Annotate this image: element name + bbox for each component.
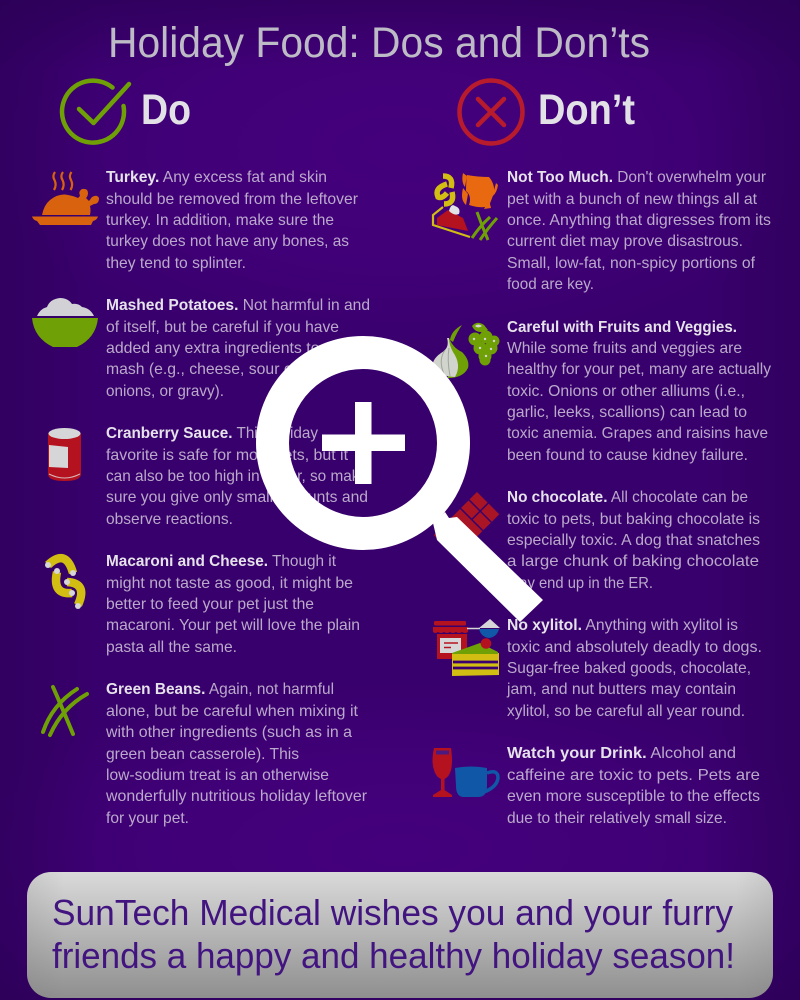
text: Cranberry Sauce: Cranberry Sauce. This holiday	[106, 425, 320, 442]
icon: onion and grapes	[433, 323, 500, 378]
text: Mashed Potatoes: mash (e.g., cheese, sour cream,	[106, 361, 332, 378]
text: Green Beans: for your pet.	[106, 810, 189, 827]
text: Watch your Drink: caffeine are toxic to pets. Pets are	[507, 767, 760, 784]
text: Watch your Drink: due to their relatively small size.	[507, 810, 727, 827]
text: Careful with Fruits and Veggies: garlic, leeks, scallions) can lead to	[507, 404, 747, 421]
text: Macaroni and Cheese: Macaroni and Cheese. Though it	[106, 553, 337, 570]
text: No xylitol: Sugar-free baked goods, chocolate,	[507, 660, 751, 677]
title: Holiday Food: Dos and Don’ts	[108, 19, 650, 67]
icon: green beans	[43, 687, 87, 735]
text: No xylitol: No xylitol. Anything with xylitol is	[507, 617, 737, 634]
text: Turkey: Turkey. Any excess fat and skin	[106, 169, 327, 186]
icon: cranberry can	[48, 428, 81, 481]
icon: jam, sugar and cake	[433, 619, 500, 676]
text: Not Too Much: pet with a bunch of new things all at	[507, 191, 758, 208]
text: Cranberry Sauce: sure you give only small amounts and	[106, 489, 368, 506]
text: Careful with Fruits and Veggies: While some fruits and veggies are	[507, 340, 742, 357]
text: Green Beans: green bean casserole). This	[106, 746, 299, 763]
panel: Don't column	[432, 169, 775, 827]
text: Careful with Fruits and Veggies: been found to cause kidney failure.	[507, 447, 748, 464]
text: Careful with Fruits and Veggies: healthy for your pet, many are actually	[507, 361, 771, 378]
text: Turkey: turkey. In addition, make sure the	[106, 212, 334, 229]
text: Mashed Potatoes: Mashed Potatoes. Not harmful in and	[106, 297, 370, 314]
text: Not Too Much: food are key.	[507, 276, 594, 293]
text: Not Too Much: current diet may prove disastrous.	[507, 233, 743, 250]
heading: Don't	[460, 80, 635, 144]
icon: mixed foods	[433, 173, 498, 240]
heading: Don't: Don’t	[538, 86, 635, 134]
text: Mashed Potatoes: of itself, but be careful if you have	[106, 319, 339, 336]
text: Mashed Potatoes: onions, or gravy).	[106, 383, 224, 400]
icon: red cross circle	[460, 80, 522, 144]
text: Green Beans: wonderfully nutritious holiday leftover	[105, 788, 367, 805]
icon: turkey	[32, 172, 99, 225]
icon: green check circle	[62, 81, 129, 143]
text: Green Beans: with other ingredients (such as in a	[105, 724, 352, 741]
text: Macaroni and Cheese: might not taste as good, it might be	[106, 575, 353, 592]
icon: chocolate bar	[434, 492, 499, 557]
text: No xylitol: toxic and absolutely deadly to dogs.	[507, 639, 762, 656]
text: Watch your Drink: even more susceptible to the effects	[507, 788, 760, 805]
text: No chocolate: a large chunk of baking chocolate	[507, 553, 759, 570]
icon: mashed potatoes bowl	[32, 298, 98, 347]
callout: footer message: friends a happy and healthy holiday season!	[52, 935, 735, 976]
text: No chocolate: No chocolate. All chocolate can be	[507, 489, 751, 506]
callout: footer message: SunTech Medical wishes you and your furry	[52, 892, 733, 933]
text: Not Too Much: once. Anything that digresses from its	[507, 212, 771, 229]
text: Mashed Potatoes: added any extra ingredients to the	[106, 340, 346, 357]
text: Turkey: turkey does not have any bones, as	[106, 233, 349, 250]
text: Careful with Fruits and Veggies: toxic anemia. Grapes and raisins have	[507, 425, 768, 442]
text: No chocolate: may end up in the ER.	[507, 575, 653, 592]
text: Macaroni and Cheese: macaroni. Your pet will love the plain	[106, 617, 360, 634]
text: Cranberry Sauce: can also be too high in sugar, so make	[106, 468, 368, 485]
panel: Do column	[32, 169, 374, 827]
text: Green Beans: alone, but be careful when mixing it	[106, 703, 359, 720]
text: Green Beans: low-sodium treat is an otherwise	[106, 767, 329, 784]
text: Turkey: should be removed from the leftover	[106, 191, 358, 208]
text: No xylitol: jam, and nut butters may contain	[506, 681, 736, 698]
text: Turkey: they tend to splinter.	[106, 255, 246, 272]
text: Not Too Much: Not Too Much. Don't overwhelm your	[507, 169, 768, 186]
callout: footer message	[27, 872, 773, 998]
heading: Do	[62, 81, 191, 143]
text: Careful with Fruits and Veggies: toxic. Onions or other alliums (i.e.,	[507, 383, 745, 400]
text: Macaroni and Cheese: better to feed your pet just the	[106, 596, 314, 613]
text: No chocolate: especially toxic. A dog that snatches	[507, 532, 760, 549]
text: Not Too Much: Small, low-fat, non-spicy portions of	[507, 255, 756, 272]
text: Green Beans: Green Beans. Again, not harmful	[106, 681, 335, 698]
text: Macaroni and Cheese: pasta all the same.	[106, 639, 237, 656]
icon: magnifying glass with plus	[272, 352, 543, 622]
text: Cranberry Sauce: favorite is safe for most pets, but it	[106, 447, 349, 464]
icon: macaroni	[45, 558, 81, 609]
text: Cranberry Sauce: observe reactions.	[106, 511, 233, 528]
icon: wine glass and coffee cup	[432, 748, 498, 797]
text: No chocolate: toxic to pets, but baking chocolate is	[507, 511, 760, 528]
text: Watch your Drink: Watch your Drink. Alcohol and	[507, 745, 732, 762]
heading: Do: Do	[141, 86, 191, 134]
text: No xylitol: xylitol, so be careful all year round.	[507, 703, 745, 720]
text: Careful with Fruits and Veggies: Careful with Fruits and Veggies.	[507, 319, 737, 336]
